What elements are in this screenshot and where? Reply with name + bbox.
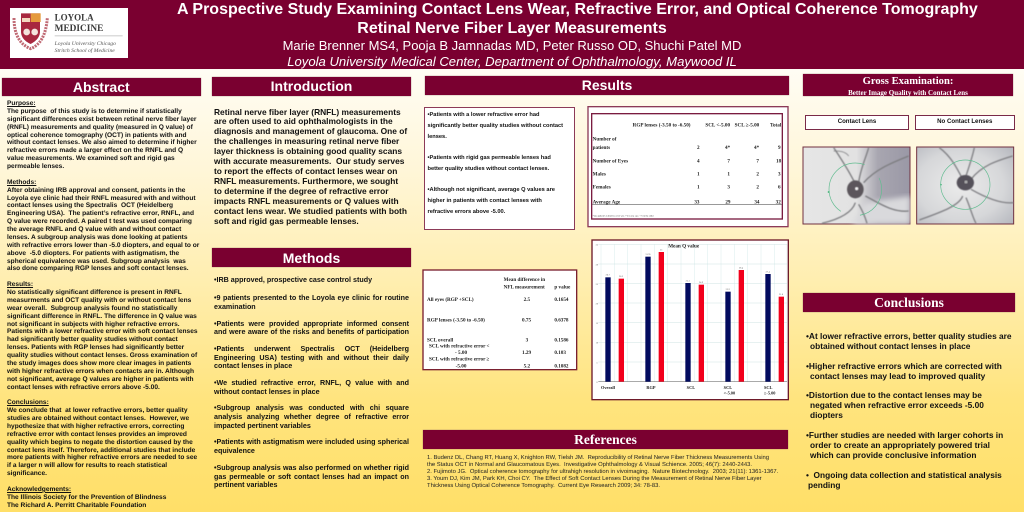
heading: conclusions: [803, 293, 1015, 312]
RNFL comparison table: 1.29: [522, 350, 531, 356]
bar chart: mean Q value: ≥-5.00: [764, 390, 775, 395]
abstract text: above -5.0 diopters. For patients with astigmatism, the: [7, 250, 179, 257]
abstract text: lenses. Patients with RGP lenses had significantly better: [7, 344, 184, 351]
results key points box: significantly better quality studies without contact: [428, 123, 563, 129]
conclusions text: •Further studies are needed with larger cohorts in: [806, 430, 1003, 440]
demographics table: 6: [778, 185, 781, 191]
abstract text: We conclude that at lower refractive errors, better quality: [7, 407, 188, 414]
abstract text: Loyola eye clinic had their RNFL measured with and without: [7, 194, 196, 202]
title: [177, 1, 978, 37]
bar chart: mean Q value: 31.95: [645, 253, 651, 256]
heading: conclusions: Conclusions: [874, 295, 944, 310]
heading: introduction: [212, 77, 411, 96]
abstract text: spherical equivalence was used. Subgroup analysis was: [7, 258, 186, 264]
methods text: examination: [214, 303, 256, 311]
demographics table: 4: [697, 158, 700, 164]
RNFL comparison table: 0.1654: [554, 297, 569, 303]
introduction text: contact lens wear. We studied patients with both: [214, 206, 407, 216]
results key points box: •Patients with a lower refractive error had: [428, 112, 540, 118]
references text: 1. Budenz DL, Chang RT, Huang X, Knighton RW, Tielsh JM. Reproducibility of Retinal Nerve Fiber Thickness Measurements Using: [427, 455, 769, 461]
RNFL comparison table: SCL with refractive error ≥: [429, 357, 490, 363]
RNFL comparison table: SCL with refractive error <: [429, 344, 490, 350]
abstract text: significant differences exist between retinal nerve fiber layer: [7, 116, 196, 123]
abstract text: the study images does show more clear images in patients: [7, 360, 191, 367]
RNFL comparison table: 0.6378: [554, 317, 569, 323]
abstract text: lenses. A subgroup analysis was done looking at patients: [7, 234, 188, 241]
RNFL comparison table: 0.103: [554, 350, 566, 356]
title: Retinal Nerve Fiber Layer Measurements: [357, 20, 667, 37]
demographics table: 3: [727, 185, 730, 191]
label: contact lens: Contact Lens: [838, 118, 876, 125]
abstract text: contact lenses with refractive errors above -5.00.: [7, 384, 160, 390]
logo: Stritch School of Medicine: [55, 47, 115, 54]
demographics table: 3: [778, 171, 781, 177]
heading: references: References: [574, 432, 637, 447]
heading: results: [425, 76, 789, 94]
logo: Loyola University Chicago: [54, 41, 116, 47]
abstract text: refractive error with contact lenses provides an improved: [7, 431, 187, 438]
demographics table: 2: [756, 185, 759, 191]
abstract text: [7, 100, 200, 509]
bar chart: mean Q value: 28.4: [739, 266, 744, 269]
demographics table: Females: [593, 185, 611, 191]
bar chart: mean Q value: 25: [596, 283, 599, 286]
demographics table: SCL ≥-5.00: [735, 123, 760, 129]
abstract text: if a larger n will allow for results to reach statistical: [7, 462, 167, 469]
logo: MEDICINE: [55, 24, 103, 34]
RNFL comparison table: 5.2: [524, 364, 531, 370]
methods text: Engineering USA) testing with and without their daily: [214, 354, 409, 362]
bar chart: mean Q value: 21.6: [779, 293, 784, 296]
RNFL comparison table: Mean difference in: [504, 277, 545, 283]
RNFL comparison table: -5.00: [456, 364, 467, 370]
demographics table: *one patient's refractive error was >-5 in one eye; <-5 in the other: [593, 214, 654, 217]
abstract text: Engineering USA). The patient’s refractive error, RNFL, and: [7, 210, 194, 217]
conclusions text: diopters: [810, 410, 843, 420]
introduction text: the challenges in measuring retinal nerve fiber: [214, 136, 399, 146]
abstract text: value measurements. We examined soft and rigid gas: [7, 155, 175, 162]
RNFL comparison table: 0.1586: [554, 337, 569, 343]
abstract text: After obtaining IRB approval and consent, patients in the: [7, 187, 185, 194]
abstract text: not significant, average Q values are higher in patients with: [7, 376, 194, 383]
bar chart: mean Q value: [591, 239, 789, 400]
bar chart: mean Q value: SCL: [764, 385, 773, 390]
label: contact lens: [805, 115, 909, 130]
demographics table: Number of: [593, 137, 617, 143]
conclusions text: • Ongoing data collection and statistical analysis: [806, 470, 1002, 480]
references text: the Status OCT in Normal and Glaucomatous Eyes. Investigative Ophthalmology & Visual Schience. 2005; 46(7): 2440-2443.: [427, 462, 752, 468]
heading: methods: [212, 248, 411, 267]
conclusions text: pending: [808, 480, 840, 490]
introduction text: diagnosis and management of glaucoma. One of: [214, 126, 407, 136]
conclusions text: •Higher refractive errors which are corrected with: [806, 361, 1002, 371]
title: A Prospective Study Examining Contact Lens Wear, Refractive Error, and Optical Coherence Tomography: [177, 1, 978, 18]
RNFL comparison table: 0.1082: [554, 364, 569, 370]
bar chart: mean Q value: 10: [596, 342, 599, 345]
RNFL comparison table: 0.75: [522, 317, 531, 323]
bar chart: mean Q value: 20: [596, 302, 599, 305]
conclusions text: which can provide conclusive information: [810, 450, 976, 460]
RNFL comparison table: SCL overall: [427, 337, 454, 343]
introduction text: to determine if the degree of refractive error: [214, 186, 389, 196]
conclusions text: obtained without contact lenses in place: [810, 341, 970, 351]
abstract text: studies are obtained without contact lenses. However, we: [7, 415, 189, 422]
RNFL comparison table: [422, 269, 578, 370]
introduction text: are often used to aid ophthalmologists in the: [214, 116, 393, 126]
RNFL comparison table: NFL measurement: [504, 284, 545, 290]
authors: Marie Brenner MS4, Pooja B Jamnadas MD, Peter Russo OD, Shuchi Patel MD: [283, 38, 741, 53]
abstract text: wear overall. Subgroup analysis found no statistically: [7, 305, 177, 312]
bar chart: mean Q value: <-5.00: [724, 390, 735, 395]
abstract text: The Richard A. Perritt Charitable Foundation: [7, 502, 146, 509]
bar chart: mean Q value: 30: [596, 263, 599, 266]
abstract text: permeable lenses.: [7, 163, 64, 170]
methods text: •IRB approved, prospective case control study: [214, 276, 372, 284]
heading: gross examination: Better Image Quality with Contact Lens: [848, 88, 968, 96]
methods text: •9 patients presented to the Loyola eye clinic for routine: [214, 294, 409, 302]
RNFL comparison table: 2.5: [524, 297, 531, 303]
heading: results: Results: [582, 77, 632, 93]
abstract text: quality studies without contact lenses. Gross examination of: [7, 352, 197, 359]
heading: references: [423, 430, 788, 448]
logo: [10, 8, 128, 58]
bar chart: mean Q value: 15: [596, 322, 599, 325]
abstract text: measurments and OCT quality with or without contact lens: [7, 297, 191, 304]
introduction text: RNFL measurements. Furthermore, we sought: [214, 176, 398, 186]
abstract text: contact lens itself. Therefore, additional studies that include: [7, 446, 195, 454]
references text: 2. Fujimoto JG. Optical coherence tomography for ultrahigh resolution in vivoimaging. Nature Biotechnology. 2003; 21(11): 1361-1367.: [427, 469, 778, 475]
heading: gross examination: Gross Examination:: [863, 76, 953, 86]
demographics table: 2: [697, 145, 700, 151]
results key points box: refractive errors above -5.00.: [428, 209, 505, 215]
demographics table: 1: [697, 185, 700, 191]
label: no contact lenses: No Contact Lenses: [937, 118, 992, 125]
methods text: pertinent variables: [214, 481, 278, 489]
results key points box: lenses.: [428, 134, 447, 140]
affiliation: Loyola University Medical Center, Department of Ophthalmology, Maywood IL: [287, 54, 737, 69]
fundus image: no contact lens: [916, 146, 1014, 224]
methods text: and were aware of the risks and benefits of participation: [214, 328, 409, 336]
methods text: without contact lenses in place: [214, 388, 320, 396]
introduction text: [214, 106, 408, 226]
abstract text: with higher refractive errors when contacts are in. Although: [7, 368, 194, 375]
abstract text: significant difference in RNFL. The difference in Q value was: [7, 313, 197, 320]
methods text: •Subgroup analysis was conducted with chi square: [214, 404, 409, 412]
demographics table: SCL <-5.00: [705, 123, 730, 129]
results key points box: [424, 106, 574, 230]
RNFL comparison table: p value: [554, 284, 571, 290]
abstract text: The purpose of this study is to determine if statistically: [7, 108, 182, 115]
abstract text: also done comparing RGP lenses and soft contact lenses.: [7, 265, 189, 272]
bar chart: mean Q value: Mean Q value: [668, 243, 700, 249]
introduction text: with accurate measurements. Our study serves: [214, 156, 404, 166]
introduction text: impacts RNFL measurements or Q values with: [214, 196, 399, 206]
bar chart: mean Q value: 0: [596, 381, 598, 384]
demographics table: 7: [727, 158, 730, 164]
demographics table: 33: [694, 199, 700, 205]
bar chart: mean Q value: 5: [596, 361, 598, 364]
abstract text: Conclusions:: [7, 399, 49, 406]
abstract text: the average RNFL and Q value with and without contact: [7, 226, 181, 233]
bar chart: mean Q value: 26.7: [606, 274, 611, 277]
methods text: analysis analyzing whether degree of refractive error: [214, 413, 409, 421]
bar chart: mean Q value: SCL: [724, 385, 732, 390]
abstract text: had significantly better quality studies without contact: [7, 336, 178, 343]
header banner: [0, 0, 1024, 69]
demographics table: [587, 106, 789, 228]
methods text: equivalence: [214, 447, 255, 455]
demographics table: 34: [754, 199, 760, 205]
methods text: •Subgroup analysis was also performed on whether rigid: [214, 464, 409, 472]
demographics table: 7: [756, 158, 759, 164]
abstract text: with refractive errors lower than -5.0 diopters, and equal to or: [7, 242, 199, 249]
demographics table: 2: [756, 171, 759, 177]
methods text: gas permeable or soft contact lenses had an impact on: [214, 472, 409, 480]
references text: 3. Youm DJ, Kim JM, Park KH, Choi CY. The Effect of Soft Contact Lenses During the Measurement of Retinal Nerve Fiber Layer: [427, 476, 762, 482]
abstract text: (RNFL) measurements and quality (measured in Q value) of: [7, 124, 193, 131]
fundus image: with contact lens: [802, 146, 911, 225]
demographics table: Average Age: [593, 199, 621, 205]
abstract text: Results:: [7, 281, 33, 288]
bar chart: mean Q value: 35: [596, 244, 599, 247]
demographics table: 4*: [754, 145, 760, 151]
bar chart: mean Q value: RGP: [646, 385, 656, 390]
heading: introduction: Introduction: [271, 78, 352, 94]
conclusions text: •Distortion due to the contact lenses may be: [806, 390, 982, 400]
RNFL comparison table: 3: [526, 337, 529, 343]
methods text: •Patients underwent Spectralis OCT (Heidelberg: [214, 345, 409, 353]
conclusions text: negated when refractive error exceeds -5.00: [810, 400, 984, 410]
bar chart: mean Q value: 24.9: [699, 281, 704, 284]
references text: [427, 454, 778, 489]
abstract text: optical coherence tomography (OCT) in patients with and: [7, 132, 187, 138]
introduction text: to report the effects of contact lenses wear on: [214, 166, 397, 176]
results key points box: •Patients with rigid gas permeable lenses had: [428, 155, 551, 161]
abstract text: No statistically significant difference is present in RNFL: [7, 289, 182, 296]
abstract text: The Illinois Society for the Prevention of Blindness: [7, 494, 166, 501]
abstract text: refractive errors made a larger effect on the RNFL and Q: [7, 147, 183, 154]
conclusions text: order to create an appropriately powered trial: [810, 440, 990, 450]
conclusions text: contact lenses may lead to improved quality: [810, 371, 985, 381]
bar chart: mean Q value: 25.3: [686, 279, 691, 282]
abstract text: not significant in subjects with higher refractive errors.: [7, 320, 180, 328]
abstract text: more patients with higher refractive errors are needed to see: [7, 454, 197, 461]
abstract text: contact lenses using the Spectralis OCT (Heidelberg: [7, 202, 173, 209]
demographics table: patients: [593, 145, 610, 151]
abstract text: Methods:: [7, 179, 36, 186]
demographics table: 9: [778, 145, 781, 151]
bar chart: mean Q value: SCL: [687, 385, 695, 390]
bar chart: mean Q value: 26.3: [619, 275, 624, 278]
introduction text: layer thickness is obtaining good quality scans: [214, 146, 402, 156]
results key points box: •Although not significant, average Q values are: [428, 187, 555, 193]
demographics table: Number of Eyes: [593, 158, 628, 164]
demographics table: 1: [697, 171, 700, 177]
bar chart: mean Q value: Overall: [601, 385, 616, 390]
demographics table: 18: [776, 158, 782, 164]
heading: abstract: Abstract: [73, 79, 130, 95]
demographics table: 1: [727, 171, 730, 177]
RNFL comparison table: - 5.00: [455, 350, 467, 356]
demographics table: Total: [770, 123, 782, 129]
references text: Thickness Using Optical Coherence Tomography. Current Eye Research 2009; 34: 78-83.: [427, 483, 660, 489]
abstract text: Q value were recorded. A paired t test was used comparing: [7, 218, 192, 225]
conclusions text: •At lower refractive errors, better quality studies are: [806, 331, 1012, 341]
bar chart: mean Q value: 27.4: [766, 270, 771, 273]
abstract text: Patients with a lower refractive error with soft contact lenses: [7, 328, 198, 335]
abstract text: significance.: [7, 470, 47, 477]
introduction text: soft and rigid gas permeable lenses.: [214, 216, 359, 226]
conclusions text: [806, 331, 1012, 490]
methods text: •Patients were provided appropriate informed consent: [214, 320, 409, 328]
demographics table: RGP lenses (-3.50 to -6.50): [633, 122, 691, 129]
introduction text: Retinal nerve fiber layer (RNFL) measurements: [214, 106, 401, 116]
demographics table: 32: [776, 199, 781, 205]
RNFL comparison table: RGP lenses (-3.50 to -6.50): [427, 316, 485, 323]
methods text: •We studied refractive error, RNFL, Q value with and: [214, 379, 409, 387]
RNFL comparison table: All eyes (RGP +SCL): [427, 296, 474, 303]
abstract text: without contact lenses. We also aimed to determine if higher: [7, 139, 197, 146]
methods text: contact lenses in place: [214, 362, 292, 370]
demographics table: 29: [725, 199, 731, 205]
results key points box: better quality studies without contact lenses.: [428, 166, 549, 172]
methods text: [214, 276, 409, 489]
bar chart: mean Q value: 33: [660, 248, 663, 251]
demographics table: 4*: [725, 145, 731, 151]
abstract text: hypothesize that with higher refractive errors, correcting: [7, 423, 184, 430]
methods text: impacted pertinent variables: [214, 422, 311, 430]
logo: LOYOLA: [55, 12, 94, 22]
methods text: •Patients with astigmatism were included using spherical: [214, 438, 409, 446]
abstract text: Acknowledgements:: [7, 486, 71, 493]
heading: abstract: [2, 78, 201, 96]
results key points box: higher in patients with contact lenses with: [428, 198, 542, 204]
bar chart: mean Q value: 22.9: [726, 288, 731, 291]
abstract text: Purpose:: [7, 100, 36, 107]
heading: methods: Methods: [283, 250, 340, 266]
label: no contact lenses: [915, 115, 1014, 130]
abstract text: quality which begins to negate the distortion caused by the: [7, 439, 193, 446]
demographics table: Males: [593, 171, 606, 177]
heading: gross examination: [803, 74, 1013, 96]
